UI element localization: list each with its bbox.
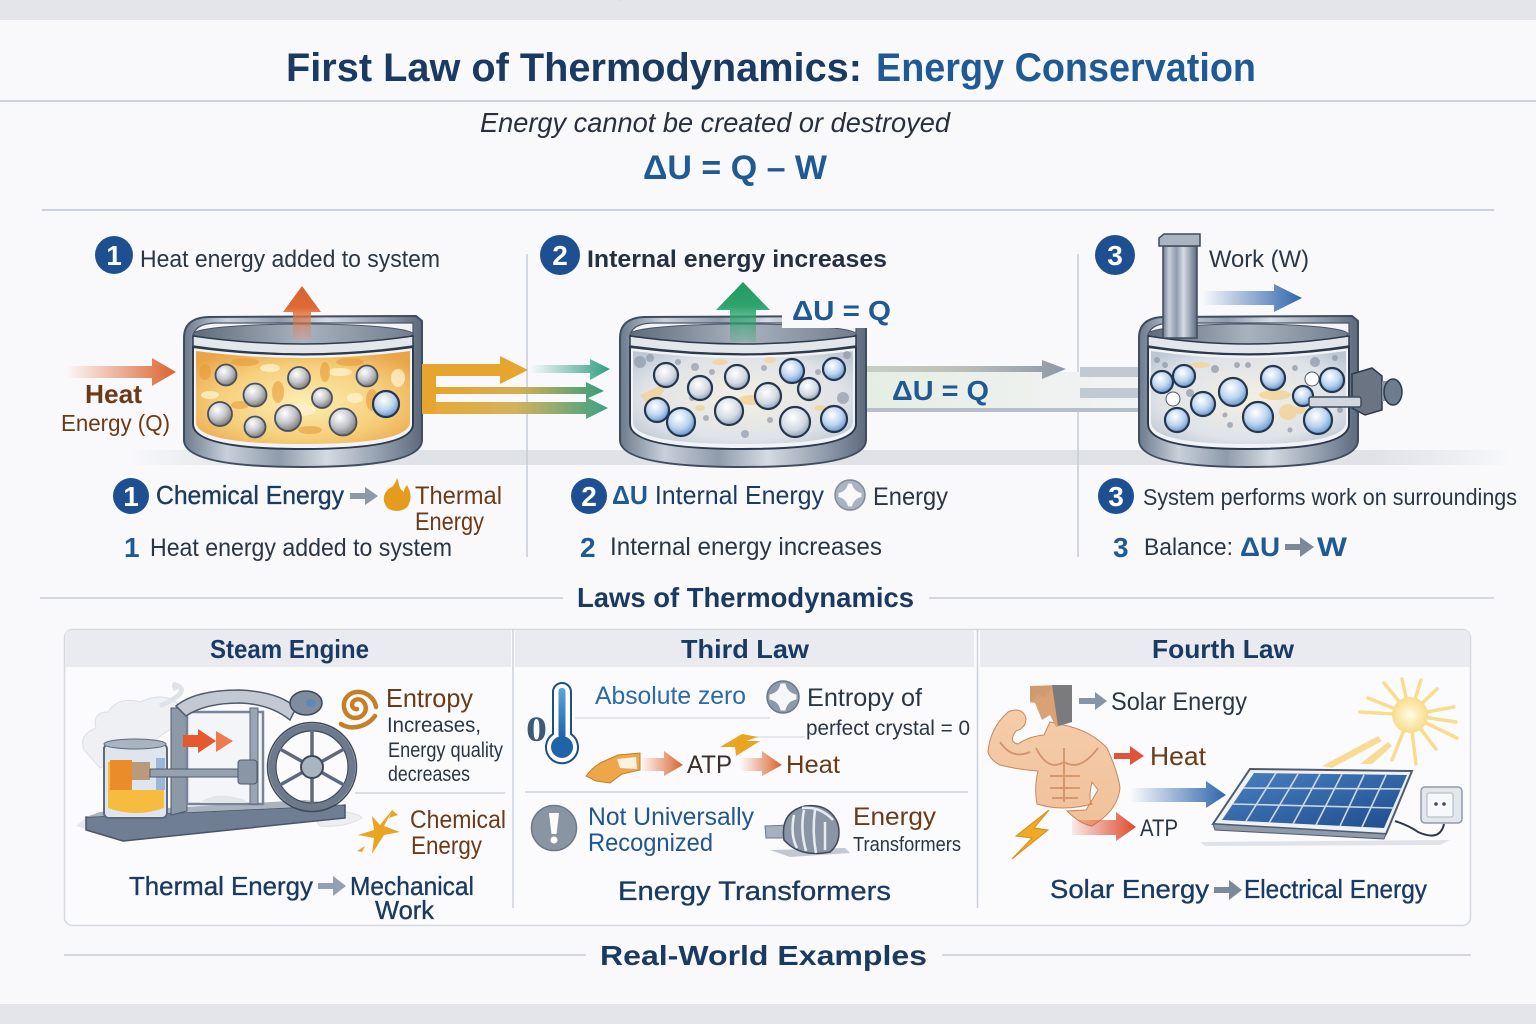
heat energy label: Energy (Q): [61, 410, 170, 436]
atp label: ATP: [1140, 815, 1178, 842]
cylinder 2: [619, 0, 866, 467]
panel: third law: [515, 630, 974, 906]
particles 3: [1151, 365, 1344, 434]
caption row 1, step 2: 2: [581, 481, 597, 512]
conversion caption: [1050, 874, 1427, 904]
icon: bolt: [720, 734, 760, 756]
illustration: sun: [1322, 679, 1457, 768]
illustration: solar panel: [1200, 769, 1450, 846]
icon: chemical spark: [357, 809, 400, 854]
heat label: Heat: [1150, 741, 1207, 771]
work label: Work (W): [1209, 246, 1309, 273]
icon: transformer: [765, 806, 850, 857]
entropy of crystal text: [806, 684, 970, 740]
step 2 heading: Internal energy increases: [587, 246, 887, 273]
panel header: Steam Engine: [210, 634, 369, 664]
icon: wall socket: [1421, 787, 1462, 823]
caption row 2, step 3: ΔU: [1240, 532, 1280, 562]
caption row 1, step 2: ΔU Internal Energy: [612, 480, 824, 510]
step 3: [1095, 234, 1402, 467]
chemical energy text: [410, 806, 506, 860]
step 3 badge: [1095, 235, 1135, 275]
title: [286, 46, 1256, 90]
entropy text: decreases: [388, 763, 470, 786]
equation: ΔU = Q – W: [643, 149, 828, 187]
conversion caption: Work: [375, 895, 435, 925]
conversion caption: Electrical Energy: [1244, 874, 1427, 904]
caption row 2, step 1: 1: [124, 532, 140, 563]
delta U label: ΔU = Q: [792, 295, 891, 326]
arrow: atp: [640, 751, 683, 776]
step 2 badge: [540, 235, 580, 275]
panel: steam engine: [65, 630, 511, 925]
caption row 1, step 2: [571, 478, 948, 514]
caption row 1, step 3: System performs work on surroundings: [1143, 484, 1517, 510]
caption row 2, step 3: W: [1317, 532, 1348, 562]
subtitle: Energy cannot be created or destroyed: [480, 107, 951, 138]
entropy of crystal text: Entropy of: [807, 684, 922, 712]
not universally recognized: [588, 803, 754, 857]
caption row 1, step 1: Thermal: [415, 482, 502, 510]
arrow: heat in: [66, 358, 176, 386]
caption row 1, step 1: [113, 478, 502, 536]
arrow: atp: [1072, 812, 1136, 841]
icon: entropy spiral: [341, 692, 376, 727]
conversion caption: Solar Energy: [1050, 874, 1209, 904]
not universally recognized: Not Universally: [588, 803, 754, 831]
caption row 1, step 2: Energy: [873, 483, 948, 511]
cylinder 1: [184, 316, 422, 467]
valve: [1309, 368, 1402, 415]
energy transformers label: Transformers: [853, 834, 961, 856]
bottom band: [0, 1004, 1536, 1024]
step 1 badge: 1: [106, 240, 122, 271]
caption row 1, step 1: Chemical Energy: [156, 480, 344, 510]
step 1 heading: Heat energy added to system: [140, 246, 440, 273]
entropy text: Entropy: [386, 683, 473, 713]
icon: warning: [532, 806, 576, 850]
title: First Law of Thermodynamics:: [286, 46, 862, 90]
icon: lightning: [1012, 810, 1049, 859]
illustration: muscular figure: [988, 685, 1120, 826]
icon: flame: [384, 478, 411, 511]
arrow: heat: [1114, 746, 1144, 765]
absolute zero label: Absolute zero: [595, 682, 746, 710]
floor shadow: [130, 450, 1510, 465]
step 2: [540, 0, 1138, 467]
caption row 2, step 3: Balance:: [1144, 534, 1233, 561]
panel header: Fourth Law: [1152, 634, 1295, 664]
caption row 2, step 1: Heat energy added to system: [150, 534, 452, 562]
label backing: [782, 298, 872, 328]
caption row 1, step 3: [1098, 478, 1517, 514]
solar energy label: Solar Energy: [1111, 688, 1247, 716]
title: Energy Conservation: [876, 46, 1256, 90]
section heading: real-world examples: Real-World Examples: [600, 940, 927, 971]
energy transformers label: Energy: [853, 803, 937, 831]
icon: hand: [586, 753, 640, 783]
panel caption: Energy Transformers: [618, 876, 891, 906]
panel header: [515, 630, 974, 667]
heat energy label: [61, 379, 170, 436]
panels frame: [64, 630, 1470, 926]
chemical energy text: Chemical: [410, 806, 506, 834]
section heading: laws: Laws of Thermodynamics: [577, 582, 914, 613]
not universally recognized: Recognized: [588, 829, 713, 857]
panel: fourth law: [980, 630, 1470, 904]
caption row 1, step 1: Energy: [415, 508, 484, 536]
caption row 2, step 3: [1113, 532, 1348, 563]
arrow: transfer 2 to 3: [867, 360, 1138, 412]
top band: [0, 0, 1536, 20]
caption row 2, step 2: Internal energy increases: [610, 533, 882, 561]
icon: thermometer at zero: [526, 683, 578, 763]
panel header: Third Law: [681, 634, 810, 664]
step 1: [61, 236, 610, 467]
icon: energy ring: [835, 480, 865, 510]
icon: thermometer at zero: 0: [526, 709, 547, 749]
particles 2: [645, 358, 847, 437]
arrow: blue: [1130, 781, 1226, 808]
panel header: [980, 630, 1470, 667]
arrow: heat out top: [283, 286, 321, 340]
caption row 1, step 1: 1: [123, 481, 139, 512]
energy transformers label: [853, 803, 961, 856]
step 3 badge: 3: [1107, 240, 1123, 271]
arrow: work out: [1202, 284, 1302, 312]
delta U transfer label: ΔU = Q: [892, 375, 989, 406]
piston: [1159, 234, 1200, 338]
entropy text: Increases,: [387, 714, 481, 737]
chemical energy text: Energy: [411, 832, 482, 860]
heat label: Heat: [786, 751, 840, 779]
conversion caption: Mechanical: [350, 871, 474, 901]
heat energy label: Heat: [85, 379, 142, 409]
conversion caption: Thermal Energy: [129, 871, 313, 901]
arrows: transfer 1 to 2: [422, 356, 610, 419]
entropy of crystal text: perfect crystal = 0: [806, 717, 970, 740]
arrow: solar energy: [1079, 692, 1107, 710]
arrow: heat: [740, 751, 782, 776]
caption row 2, step 3: 3: [1113, 532, 1129, 563]
entropy text: Energy quality: [388, 739, 503, 762]
icon: crystal: [767, 681, 799, 713]
step 1 badge: [95, 236, 133, 274]
atp label: ATP: [687, 751, 732, 779]
particles 1: [208, 364, 399, 438]
arrow: energy up: [716, 282, 770, 342]
cylinder 3: [1139, 316, 1358, 467]
conversion caption: [129, 871, 474, 925]
illustration: steam engine: [76, 685, 362, 842]
caption row 1, step 3: 3: [1108, 481, 1124, 512]
panel header: [65, 630, 511, 667]
caption row 2, step 2: 2: [580, 532, 596, 563]
entropy text: [386, 683, 503, 786]
step 2 badge: 2: [552, 240, 568, 271]
